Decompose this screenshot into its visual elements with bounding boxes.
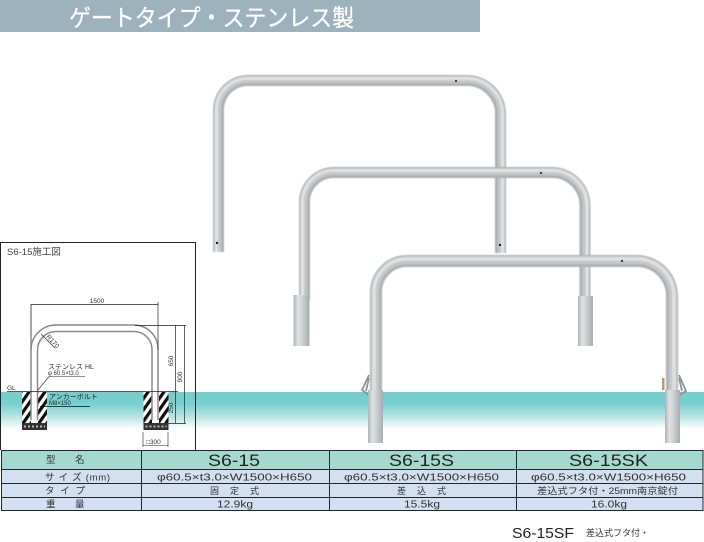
anchor bolt label: M8×150 — [49, 401, 72, 407]
weight values: 16.0kg — [591, 500, 627, 510]
row labels: 型 — [46, 455, 56, 466]
type values — [210, 485, 678, 496]
table backgrounds — [1, 450, 703, 510]
type values: 固 定 式 — [210, 485, 259, 496]
stainless pipe label: ステンレス HL — [48, 363, 94, 371]
row labels: 量 — [75, 500, 85, 510]
bollard outline — [31, 304, 158, 420]
model names: S6-15 — [208, 451, 260, 470]
photo: bollard S6-15SK insert type with lid and lock — [362, 259, 686, 443]
footnote: S6-15SF: 差込式フタ付・ — [586, 527, 649, 538]
row labels: サ イ ズ (mm) — [45, 472, 110, 484]
size values: φ60.5×t3.0×W1500×H650 — [531, 472, 687, 484]
foundation width dimension: □300 — [146, 439, 161, 446]
model names: S6-15SK — [569, 451, 649, 470]
row labels: 重 — [46, 498, 56, 510]
size values — [157, 472, 687, 484]
photo: bollard S6-15 fixed type — [216, 78, 503, 253]
footnote: S6-15SF: S6-15SF — [512, 526, 574, 542]
title banner: ゲートタイプ・ステンレス製 — [69, 5, 354, 31]
dimension values: 250 — [168, 402, 175, 413]
drawing title: S6-15施工図 — [7, 246, 61, 258]
radius label R170: R170 — [45, 334, 60, 350]
dimension values: 650 — [168, 355, 175, 366]
footnote: S6-15SF — [512, 526, 649, 542]
table grid — [1, 450, 703, 511]
title banner — [0, 0, 480, 32]
teal ground band — [0, 392, 704, 429]
stainless pipe label: φ 60.5×t3.0 — [48, 371, 79, 377]
dimension values: 900 — [177, 371, 184, 382]
foundation blocks — [22, 392, 168, 430]
row labels — [45, 454, 110, 510]
weight values — [217, 500, 627, 510]
type values: 差 込 式 — [397, 485, 446, 496]
foundation width dimension — [143, 432, 168, 447]
row labels: タ イ プ — [45, 486, 85, 497]
drawing frame — [0, 242, 196, 450]
specification table — [1, 450, 703, 511]
dimension values — [168, 355, 184, 413]
weight values: 15.5kg — [404, 500, 440, 510]
type values: 差込式フタ付・25mm南京錠付 — [537, 485, 678, 496]
stainless pipe label — [38, 363, 94, 390]
model names: S6-15S — [389, 451, 454, 470]
photo: bollard S6-15S insert type — [294, 170, 593, 346]
panel: S6-15 construction drawing — [0, 242, 196, 450]
row labels: 名 — [75, 454, 85, 466]
height dimensions — [135, 325, 186, 424]
width dimension 1500 — [31, 298, 158, 350]
model names — [208, 451, 649, 470]
anchor bolt label — [40, 393, 98, 407]
ground line and GL label: GL — [7, 385, 16, 392]
anchor bolt label: アンカーボルト — [49, 393, 98, 401]
width dimension 1500: 1500 — [90, 298, 105, 305]
size values: φ60.5×t3.0×W1500×H650 — [157, 472, 313, 484]
size values: φ60.5×t3.0×W1500×H650 — [344, 472, 500, 484]
weight values: 12.9kg — [217, 500, 253, 510]
